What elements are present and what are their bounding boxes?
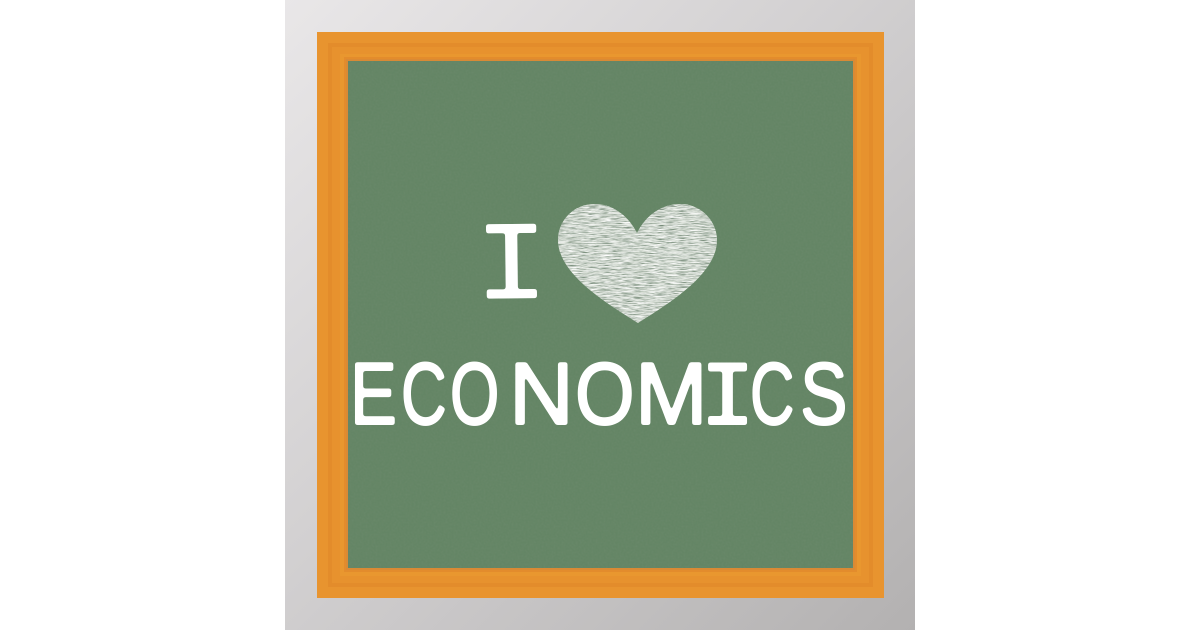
- chalkboard panel: [348, 61, 853, 568]
- word: ECONOMICS: O: [575, 344, 635, 442]
- word: ECONOMICS: [350, 344, 847, 452]
- icon: chalk heart: [556, 202, 719, 325]
- word: ECONOMICS: E: [350, 344, 397, 442]
- word: ECONOMICS: C: [401, 344, 447, 442]
- letter I: I: [474, 205, 549, 333]
- word: ECONOMICS: C: [750, 344, 794, 442]
- word: ECONOMICS: N: [509, 344, 574, 442]
- word: ECONOMICS: M: [635, 344, 707, 442]
- word: ECONOMICS: S: [800, 344, 847, 442]
- word: ECONOMICS: I: [700, 346, 755, 452]
- poster background: [285, 0, 915, 630]
- wooden frame: [317, 32, 884, 598]
- word: ECONOMICS: O: [450, 344, 499, 442]
